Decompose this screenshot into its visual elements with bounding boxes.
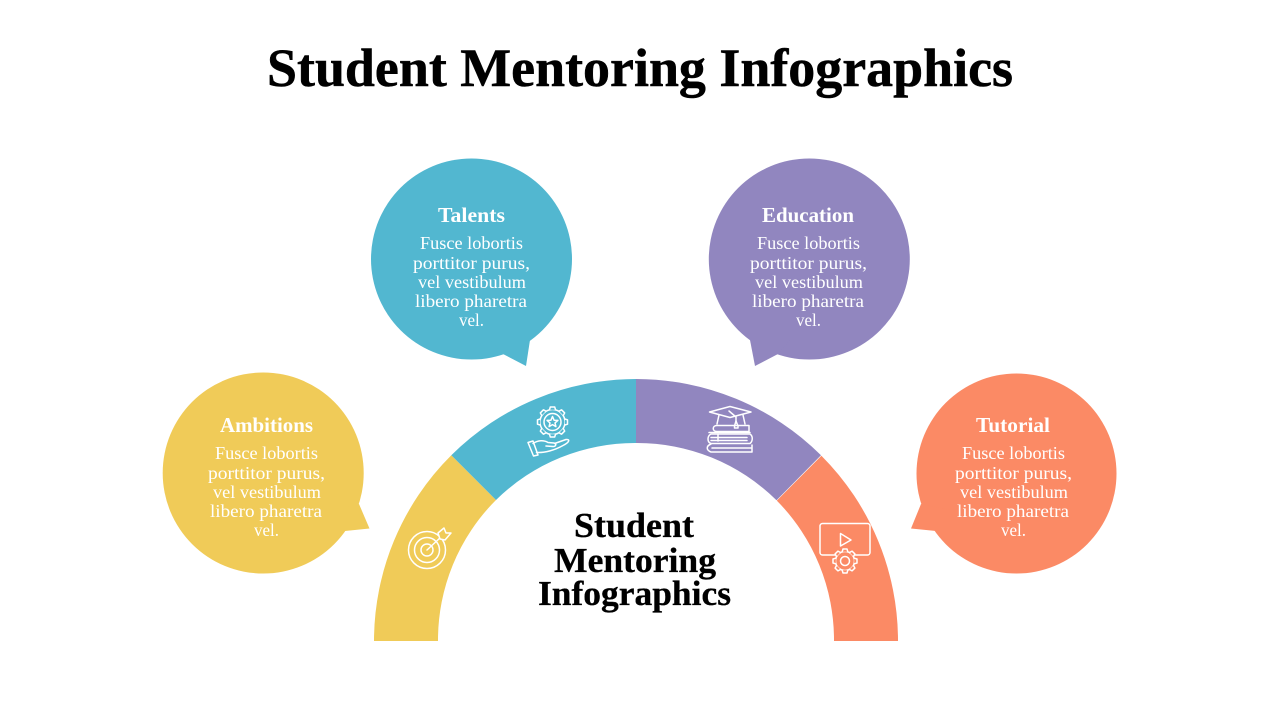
text: talents description: libero pharetra	[415, 291, 527, 311]
ring segment: tutorial	[777, 456, 898, 641]
text: tutorial description: Fusce lobortis	[962, 443, 1065, 463]
heading: ambitions: Ambitions	[220, 413, 313, 437]
panel: ambitions bubble	[163, 372, 370, 574]
ring segment: education	[636, 379, 821, 500]
text: ambitions description	[208, 443, 325, 540]
text: education description: vel.	[796, 310, 821, 330]
semicircle ring	[374, 379, 898, 641]
text: tutorial description: libero pharetra	[957, 501, 1069, 521]
title: Student Mentoring Infographics	[267, 38, 1013, 98]
icon: video screen with gear	[820, 524, 870, 573]
text: talents description	[413, 233, 530, 330]
text: talents description: Fusce lobortis	[420, 233, 523, 253]
text: tutorial description: porttitor purus,	[955, 463, 1072, 483]
panel: tutorial bubble	[911, 374, 1116, 574]
heading: talents: Talents	[438, 203, 505, 227]
center label: Mentoring	[554, 541, 717, 580]
text: ambitions description: libero pharetra	[210, 501, 322, 521]
text: education description	[750, 233, 867, 330]
text: tutorial description	[955, 443, 1072, 540]
center label	[538, 506, 731, 613]
center label: Infographics	[538, 574, 731, 613]
ring segment: ambitions	[374, 455, 496, 641]
heading: education: Education	[762, 203, 854, 227]
text: ambitions description: Fusce lobortis	[215, 443, 318, 463]
text: talents description: porttitor purus,	[413, 253, 530, 273]
text: ambitions description: vel.	[254, 520, 279, 540]
text: education description: porttitor purus,	[750, 253, 867, 273]
text: ambitions description: vel vestibulum	[213, 482, 321, 502]
text: ambitions description: porttitor purus,	[208, 463, 325, 483]
text: education description: libero pharetra	[752, 291, 864, 311]
panel: talents bubble	[371, 158, 572, 366]
center label: Student	[574, 506, 694, 545]
icon: target with arrow	[408, 528, 451, 568]
text: tutorial description: vel vestibulum	[960, 482, 1068, 502]
icon: gear with star above hand	[528, 407, 569, 456]
text: education description: vel vestibulum	[755, 272, 863, 292]
text: tutorial description: vel.	[1001, 520, 1026, 540]
text: education description: Fusce lobortis	[757, 233, 860, 253]
text: talents description: vel vestibulum	[418, 272, 526, 292]
panel: education bubble	[709, 158, 910, 366]
heading: tutorial: Tutorial	[976, 413, 1050, 437]
icon: graduation cap on books	[707, 406, 752, 452]
text: talents description: vel.	[459, 310, 484, 330]
ring segment: talents	[451, 379, 636, 500]
